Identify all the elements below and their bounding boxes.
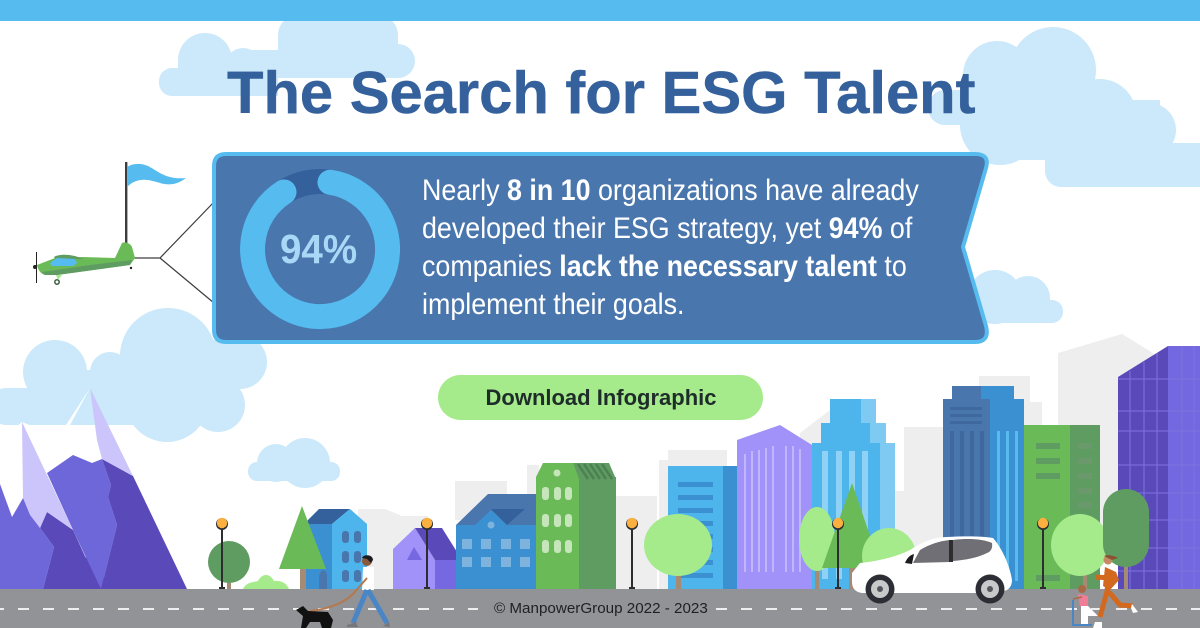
title: The Search for ESG Talent — [227, 59, 976, 126]
cloud: small right — [968, 270, 1063, 324]
cloud: bottom left — [0, 308, 267, 442]
building: blue house — [306, 509, 367, 589]
banner text: Nearly 8 in 10 organizations have already — [422, 174, 919, 207]
tree: light green — [644, 514, 712, 589]
mountains — [0, 388, 187, 589]
child on scooter — [1073, 585, 1098, 625]
tree and bush left — [208, 541, 289, 589]
building: dark blue tower — [943, 386, 1024, 589]
banner text: implement their goals. — [422, 288, 685, 321]
donut chart: 94% — [252, 182, 388, 317]
runner — [1093, 555, 1138, 628]
icon: green plane — [33, 242, 135, 284]
trees right — [799, 483, 1149, 589]
building: purple house — [393, 528, 462, 589]
banner text: developed their ESG strategy, yet 94% of — [422, 212, 912, 245]
cloud: behind title left — [159, 15, 415, 96]
top bar — [0, 0, 1200, 21]
background skyline — [358, 334, 1153, 589]
banner text: companies lack the necessary talent to — [422, 250, 907, 283]
copyright: © ManpowerGroup 2022 - 2023 — [494, 600, 708, 617]
building: blue town house — [456, 494, 536, 589]
donut value: 94% — [280, 227, 357, 272]
banner text — [422, 174, 919, 321]
tree: triangle by blue house — [279, 506, 326, 589]
building: stepped sky blue tower — [812, 399, 895, 589]
tow lines — [134, 202, 214, 303]
person walking dog — [296, 555, 390, 628]
building: light blue office — [668, 466, 737, 589]
cloud: top right — [928, 27, 1200, 187]
flag on pole — [125, 162, 186, 244]
building: indigo glass tower — [1118, 346, 1200, 589]
button: download: Download Infographic — [486, 385, 716, 410]
cloud: small centre left — [248, 438, 340, 488]
car — [852, 536, 1012, 604]
building: green tower — [1024, 425, 1100, 589]
road — [0, 589, 1200, 628]
building: purple tower — [737, 425, 812, 589]
panel: banner — [214, 154, 987, 342]
street lamps — [216, 518, 1049, 589]
button: download — [438, 375, 763, 420]
building: green town house — [536, 463, 616, 589]
